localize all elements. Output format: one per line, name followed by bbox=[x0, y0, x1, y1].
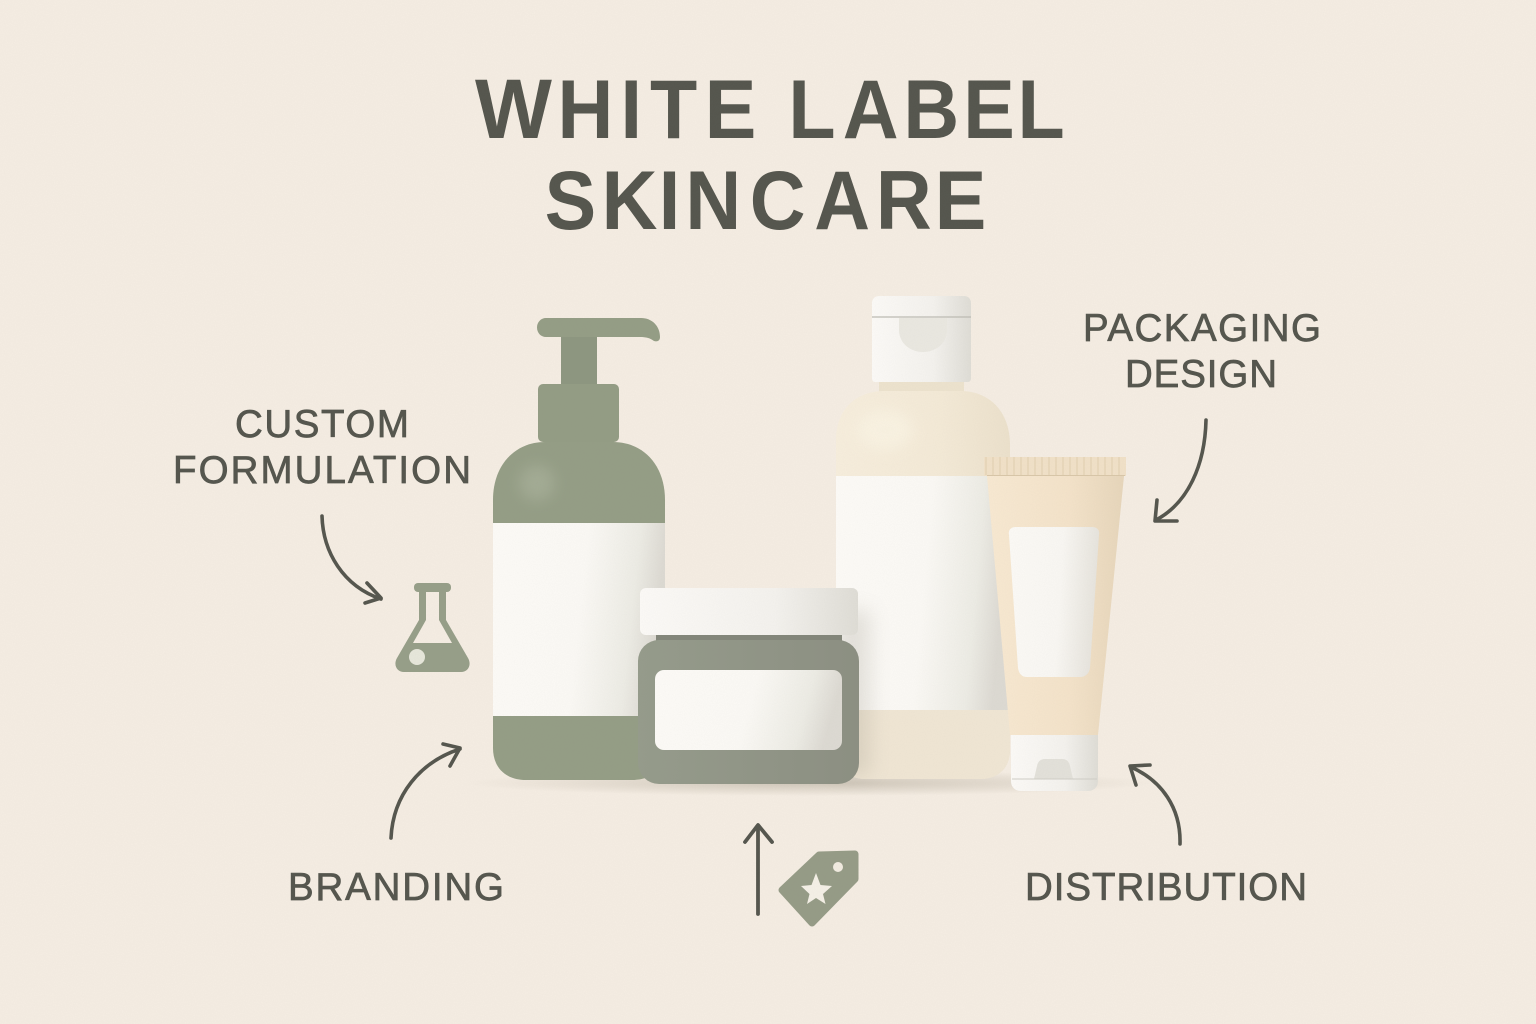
label: packaging design: PACKAGING bbox=[1083, 307, 1321, 350]
title: SKINCARE bbox=[545, 154, 986, 248]
flip cap bbox=[872, 296, 971, 382]
label: packaging design: DESIGN bbox=[1125, 353, 1277, 396]
pump stem bbox=[561, 336, 597, 384]
jar shadow bbox=[835, 610, 870, 775]
arrow: distribution bbox=[1130, 765, 1180, 844]
bottle neck bbox=[879, 380, 964, 394]
jar label bbox=[655, 670, 842, 750]
bottle body bbox=[493, 442, 665, 780]
title bbox=[475, 62, 1065, 248]
cream tube bbox=[984, 457, 1126, 791]
label: custom formulation bbox=[173, 403, 471, 492]
tube body bbox=[987, 476, 1124, 735]
pump collar bbox=[538, 384, 619, 442]
jar neck bbox=[656, 634, 842, 642]
tall cream bottle bbox=[836, 296, 1010, 780]
tube label bbox=[1009, 527, 1099, 677]
label: custom formulation: CUSTOM bbox=[235, 403, 409, 446]
pump bottle bbox=[493, 318, 665, 780]
tube cap bbox=[1011, 735, 1098, 791]
arrow: custom formulation bbox=[322, 516, 381, 603]
jar lid bbox=[640, 588, 858, 635]
jar body bbox=[638, 640, 859, 784]
ground shadow bbox=[465, 770, 1155, 796]
title: LABEL bbox=[788, 63, 1065, 157]
label: custom formulation: FORMULATION bbox=[173, 449, 471, 492]
icon: flask bbox=[395, 583, 470, 672]
arrow: branding bbox=[391, 744, 460, 838]
arrow: up bbox=[745, 825, 772, 914]
label: distribution: DISTRIBUTION bbox=[1025, 866, 1307, 909]
jar bbox=[638, 588, 859, 784]
title: HITE bbox=[558, 63, 756, 157]
pump head bbox=[537, 318, 660, 341]
label: packaging design bbox=[1083, 307, 1321, 396]
arrow: packaging design bbox=[1155, 420, 1206, 521]
bottle body bbox=[836, 391, 1010, 779]
title: W bbox=[475, 62, 553, 156]
label: branding: BRANDING bbox=[288, 866, 504, 909]
tube crimp bbox=[984, 457, 1126, 476]
bottle label bbox=[493, 523, 665, 716]
icon: price tag with star bbox=[782, 854, 855, 923]
bottle label bbox=[836, 476, 1010, 710]
